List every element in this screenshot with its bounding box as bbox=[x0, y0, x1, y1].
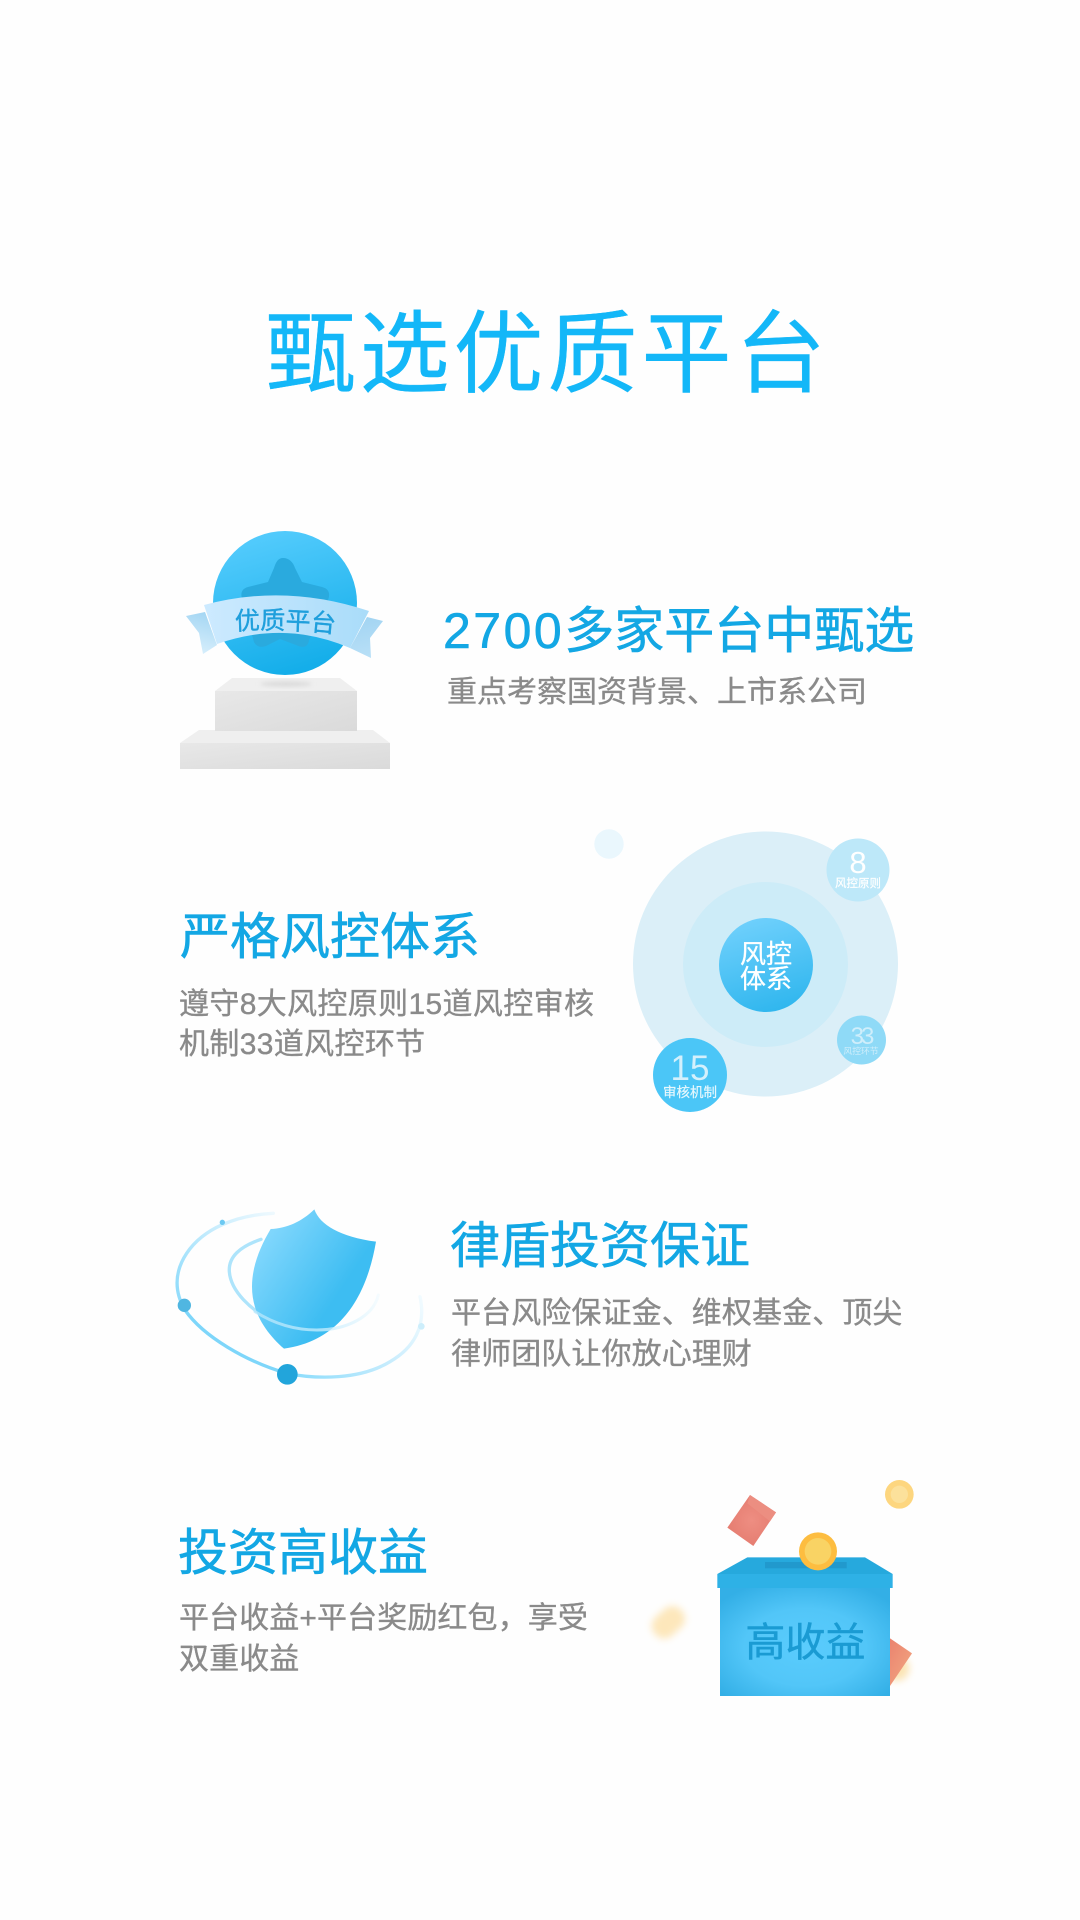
text: risk control description bbox=[179, 988, 594, 1061]
box lid bbox=[717, 1557, 893, 1588]
inner orbit front bbox=[255, 1295, 378, 1330]
box body bbox=[720, 1588, 890, 1696]
red envelope top bbox=[727, 1495, 776, 1546]
orbit dots bbox=[220, 1220, 225, 1225]
title: 甄选优质平台 bbox=[266, 305, 830, 405]
panel: legal shield bbox=[177, 1209, 903, 1385]
heading: high returns: 投资高收益 bbox=[178, 1525, 428, 1581]
bubble: 15 reviews: 审核机制 bbox=[663, 1085, 717, 1100]
panel: high returns bbox=[178, 1480, 914, 1696]
upper podium step bbox=[215, 678, 357, 731]
core circle: 风控 bbox=[740, 939, 792, 969]
panel: platform selection bbox=[180, 531, 914, 769]
bubble: 33 steps bbox=[837, 1016, 886, 1064]
heading: risk control: 严格风控体系 bbox=[180, 909, 480, 965]
ribbon tails bbox=[186, 612, 383, 658]
outer orbit bbox=[177, 1213, 422, 1377]
red envelope behind box bbox=[884, 1636, 912, 1686]
text: high returns description: 平台收益+平台奖励红包，享受 bbox=[179, 1602, 588, 1635]
gold coin bbox=[799, 1532, 837, 1570]
text: legal shield description: 律师团队让你放心理财 bbox=[451, 1338, 752, 1371]
core circle bbox=[719, 918, 813, 1012]
panel: risk control bbox=[179, 829, 898, 1112]
text: legal shield description: 平台风险保证金、维权基金、顶尖 bbox=[451, 1297, 902, 1330]
text: risk control description: 机制33道风控环节 bbox=[179, 1028, 426, 1061]
lower podium step bbox=[180, 730, 390, 769]
icon: podium with badge bbox=[180, 531, 390, 769]
heading: legal shield: 律盾投资保证 bbox=[450, 1218, 750, 1274]
text: platform criteria: 重点考察国资背景、上市系公司 bbox=[447, 676, 867, 709]
bubble: 33 steps: 风控环节 bbox=[843, 1045, 879, 1056]
badge circle bbox=[213, 531, 357, 675]
inner orbit back bbox=[229, 1239, 277, 1322]
text: legal shield description bbox=[451, 1297, 902, 1371]
ribbon label: 优质平台 bbox=[236, 608, 334, 634]
star on badge bbox=[241, 558, 329, 647]
box label: 高收益 bbox=[745, 1621, 865, 1665]
blurred coin bbox=[647, 1601, 690, 1643]
bubble: 8 principles bbox=[826, 838, 890, 902]
text: risk control description: 遵守8大风控原则15道风控审核 bbox=[179, 988, 594, 1021]
small coin bbox=[885, 1480, 914, 1509]
text: high returns description bbox=[179, 1602, 588, 1676]
heading: 2700 platforms: 2700多家平台中甄选 bbox=[443, 603, 914, 659]
outer ring bbox=[633, 832, 898, 1096]
icon: ballot box with coins bbox=[647, 1480, 914, 1696]
icon: shield with orbits bbox=[177, 1209, 425, 1385]
diagram: risk control circles bbox=[594, 829, 898, 1112]
decorative dot bbox=[594, 829, 624, 859]
bubble: 8 principles: 8 bbox=[849, 845, 867, 880]
shield bbox=[252, 1209, 376, 1349]
ribbon band bbox=[204, 595, 369, 648]
core circle: 体系 bbox=[740, 964, 792, 994]
bubble: 15 reviews bbox=[653, 1038, 727, 1112]
middle ring bbox=[683, 882, 848, 1047]
bubble: 15 reviews: 15 bbox=[671, 1049, 709, 1088]
text: high returns description: 双重收益 bbox=[179, 1643, 299, 1676]
bubble: 33 steps: 33 bbox=[851, 1023, 874, 1050]
bubble: 8 principles: 风控原则 bbox=[835, 876, 881, 890]
